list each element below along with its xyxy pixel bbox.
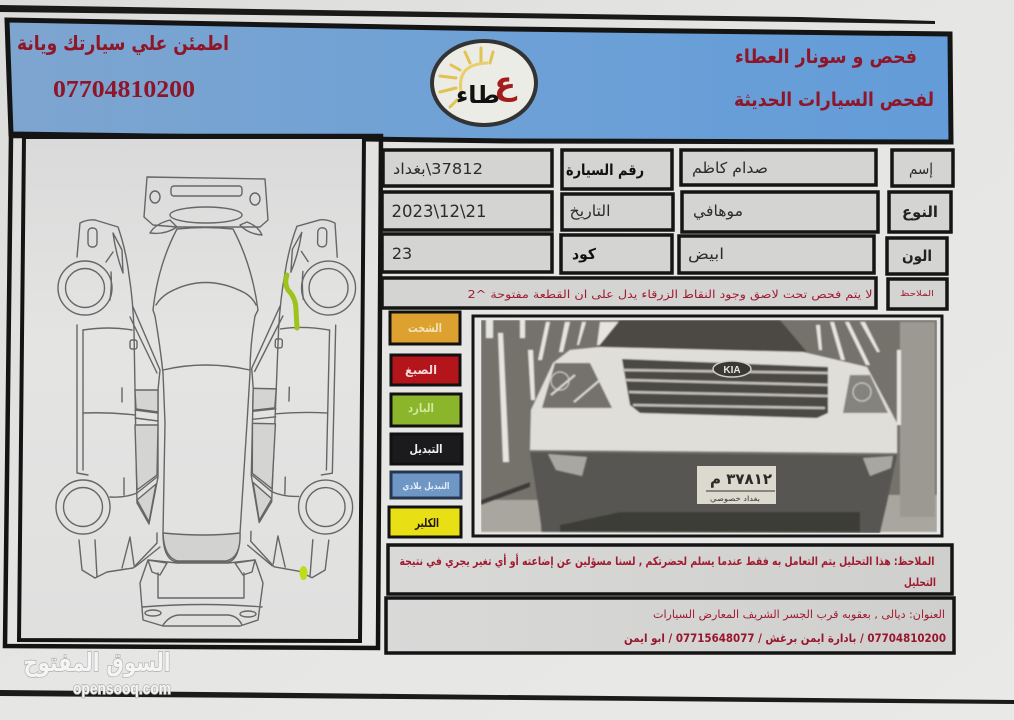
row 3: code value: 23 bbox=[392, 244, 412, 263]
address box: العنوان: ديالى , بعقوبه قرب الجسر الشريف المعارض السيارات bbox=[653, 608, 945, 621]
car photo bbox=[473, 316, 942, 536]
row 2: date value bbox=[382, 192, 552, 230]
colour legend bbox=[389, 312, 462, 537]
disclaimer note box: التحليل bbox=[904, 575, 936, 589]
left side of car bbox=[56, 220, 160, 578]
legend: yellow bbox=[389, 507, 461, 537]
row 2: date value: 2023\12\21 bbox=[392, 202, 486, 222]
car diagram panel bbox=[5, 136, 381, 648]
legend: orange: الشخت bbox=[408, 321, 442, 335]
lower bumper bbox=[530, 452, 897, 533]
row 1: plate value bbox=[383, 150, 552, 186]
bottom border line bbox=[0, 690, 1014, 704]
row 4: note label bbox=[888, 279, 947, 309]
legend: red bbox=[391, 355, 460, 385]
fog lamps bbox=[548, 454, 893, 476]
title line 1: فحص و سونار العطاء bbox=[735, 46, 917, 68]
legend: blue bbox=[391, 472, 461, 498]
row 3: code label: كود bbox=[572, 245, 596, 263]
header banner bbox=[7, 20, 951, 142]
row 3: colour label: الون bbox=[902, 247, 932, 265]
logo: ع bbox=[494, 64, 518, 102]
row 1: plate label: رقم السيارة bbox=[566, 161, 644, 179]
licence plate: بغداد خصوصي bbox=[710, 495, 760, 503]
row 3: colour value: ابيض bbox=[688, 245, 724, 263]
disclaimer note box bbox=[388, 545, 952, 594]
title line 2: لفحص السيارات الحديثة bbox=[734, 89, 934, 111]
right side of car bbox=[247, 218, 359, 579]
row 1: plate label bbox=[562, 150, 672, 189]
row 3: code label bbox=[561, 235, 672, 273]
slogan: اطمئن علي سيارتك ويانة bbox=[17, 31, 229, 56]
legend: yellow: الكلير bbox=[414, 516, 439, 530]
watermark: السوق المفتوح bbox=[24, 648, 170, 678]
row 2: type label bbox=[889, 192, 951, 232]
row 1: plate value: 37812\بغداد bbox=[393, 160, 483, 178]
logo bbox=[432, 41, 536, 125]
row 1: name value: صدام كاظم bbox=[692, 159, 768, 177]
row 1: name value bbox=[681, 150, 876, 185]
row 2: date label bbox=[562, 194, 673, 230]
address box bbox=[386, 598, 954, 653]
licence plate: ٣٧٨١٢ م bbox=[710, 470, 772, 488]
row 1: name label bbox=[892, 150, 953, 186]
watermark bbox=[24, 648, 171, 698]
info table bbox=[382, 150, 953, 309]
row 4: note text bbox=[382, 278, 876, 308]
row 3: colour label bbox=[887, 238, 947, 274]
row 2: type label: النوع bbox=[902, 203, 938, 221]
legend: blue: التبديل بلادي bbox=[402, 482, 450, 492]
legend: green bbox=[391, 394, 461, 426]
address box: 07704810200 / بادارة ايمن برغش / 07715648077 / ابو ايمن bbox=[624, 631, 946, 646]
legend: green: البارد bbox=[408, 401, 434, 415]
green paint mark: rear bumper bbox=[300, 566, 308, 580]
header phone number: 07704810200 bbox=[53, 77, 195, 103]
row 3: colour value bbox=[679, 236, 874, 273]
car body bbox=[530, 347, 897, 453]
green paint mark: door edge bbox=[286, 275, 297, 328]
KIA emblem: KIA bbox=[723, 365, 741, 376]
right headlight bbox=[843, 375, 888, 413]
row 1: name label: إسم bbox=[909, 160, 933, 178]
radiator grille bbox=[622, 359, 828, 418]
top border line bbox=[0, 5, 935, 24]
watermark: opensooq.com bbox=[73, 679, 171, 698]
car top view body bbox=[153, 228, 258, 562]
rear bumper bbox=[140, 560, 263, 626]
legend: orange bbox=[390, 312, 460, 344]
logo: طاء bbox=[456, 81, 500, 109]
legend: black: التبديل bbox=[410, 442, 442, 456]
row 4: note label: الملاحظ bbox=[900, 289, 934, 298]
left headlight bbox=[542, 363, 612, 408]
row 4: note text: لا يتم فحص تحت لاصق وجود النقاط الزرقاء يدل على ان القطعة مفتوحة ^2 bbox=[467, 288, 872, 302]
front bumper bbox=[144, 177, 268, 235]
row 2: date label: التاريخ bbox=[570, 202, 610, 220]
row 3: code value bbox=[382, 234, 552, 272]
legend: red: الصبغ bbox=[405, 363, 437, 377]
legend: black bbox=[391, 434, 462, 464]
row 2: type value: موهافي bbox=[693, 202, 743, 221]
windscreen bbox=[598, 320, 807, 352]
row 2: type value bbox=[682, 192, 878, 232]
licence plate bbox=[697, 466, 776, 504]
KIA emblem bbox=[713, 361, 751, 377]
